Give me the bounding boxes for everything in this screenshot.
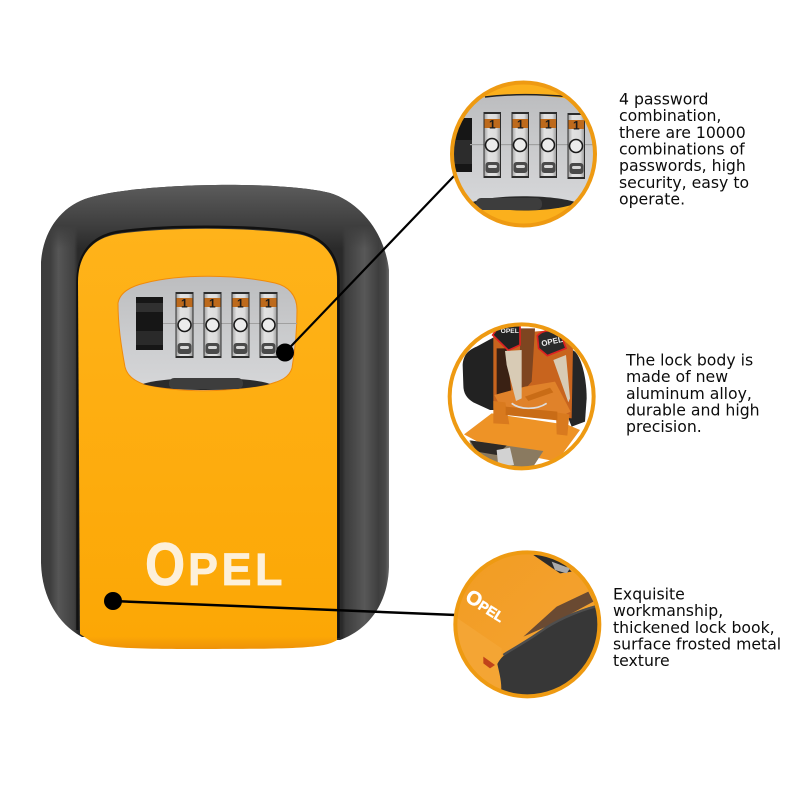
text block: password: security, easy to: [619, 173, 749, 192]
text block: lock body: durable and high: [626, 400, 760, 420]
zoomed dial 1: 1: [489, 118, 496, 132]
text block: lock body: precision.: [626, 417, 702, 436]
dial 2: [204, 292, 222, 358]
dial 3: [232, 292, 250, 358]
dial 4: 1: [265, 296, 272, 310]
text block: lock body: [625, 350, 760, 436]
text block: workmanship: [613, 584, 781, 670]
orange front panel: [78, 229, 337, 649]
OPEL logo: O: [145, 530, 185, 598]
text block: workmanship: thickened lock book,: [613, 618, 775, 637]
callout line: panel: [104, 592, 456, 615]
text block: workmanship: surface frosted metal: [613, 634, 781, 654]
text block: password: there are 10000: [619, 123, 746, 142]
detail circle: frosted metal corner: [455, 552, 607, 700]
zoomed dial 3: 1: [545, 118, 552, 132]
text block: password: combinations of: [619, 140, 745, 158]
text block: password: passwords, high: [619, 156, 746, 175]
text block: workmanship: texture: [613, 651, 670, 670]
text block: workmanship: workmanship,: [613, 601, 723, 620]
combination window: [118, 276, 297, 391]
dial 1: [176, 292, 194, 358]
dial 4: [260, 292, 278, 358]
text block: password: 4 password: [619, 90, 708, 108]
detail circle: password dials: [445, 82, 610, 226]
zoomed dial 1: [484, 112, 501, 178]
zoomed dial 3: [540, 112, 557, 178]
zoomed dial 4: 1: [573, 118, 580, 132]
lock box product: [41, 185, 389, 649]
dark housing: [41, 185, 389, 640]
detail circle: open lock with keys: OPEL: [501, 328, 519, 335]
detail circle: open lock with keys: OPEL: [541, 335, 564, 348]
text block: lock body: made of new: [626, 367, 728, 386]
text block: password: [619, 90, 749, 208]
zoomed dial 2: [512, 112, 529, 178]
text block: password: combination,: [619, 106, 721, 125]
dial 1: 1: [181, 296, 188, 310]
dial 3: 1: [237, 296, 244, 310]
text block: workmanship: Exquisite: [613, 584, 685, 604]
panel shadow edge: [78, 227, 338, 638]
OPEL logo: [145, 530, 286, 598]
zoomed dial 2: 1: [517, 118, 524, 132]
text block: lock body: aluminum alloy,: [626, 384, 752, 403]
detail circle: open lock with keys: [450, 324, 594, 472]
callout line: password dials: [276, 176, 454, 362]
text block: lock body: The lock body is: [625, 350, 753, 370]
release button: [143, 378, 270, 390]
detail circle: frosted metal corner: OPEL: [461, 586, 510, 627]
slider: [136, 297, 163, 350]
text block: password: operate.: [619, 190, 685, 208]
dial guide line: [163, 323, 297, 324]
OPEL logo: PEL: [188, 544, 286, 595]
zoomed dial 4: [568, 113, 585, 179]
dial 2: 1: [209, 296, 216, 310]
